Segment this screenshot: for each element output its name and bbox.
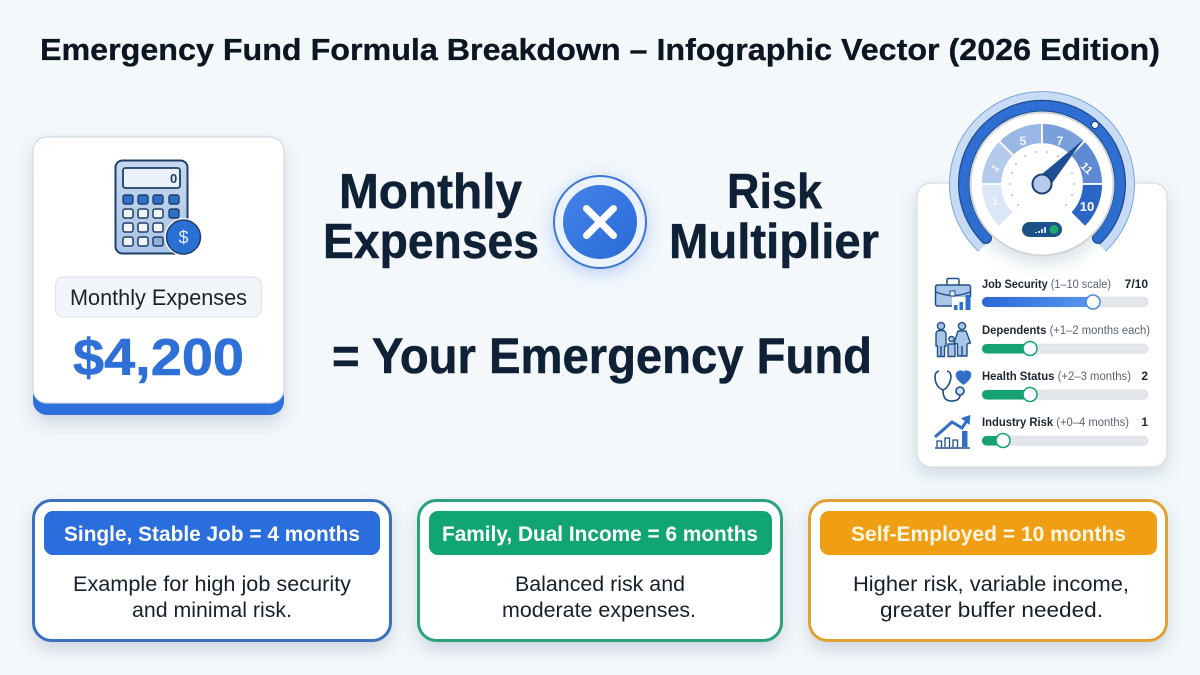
formula: risk multiplier (669, 165, 879, 269)
formula result: = Your Emergency Fund (332, 328, 872, 384)
icon: rising chart (935, 415, 970, 448)
formula: monthly expenses: Monthly (339, 165, 522, 219)
slider: industry risk (982, 415, 1148, 448)
label pill: Monthly Expenses (70, 285, 247, 310)
scenario card: family (418, 500, 782, 640)
scenario card: single (34, 500, 390, 640)
icon: stethoscope and heart (935, 371, 970, 401)
slider: job security: 7/10 (1125, 277, 1148, 291)
gauge: 1 (989, 162, 1002, 175)
scenario card: family: Balanced risk and (515, 572, 685, 596)
scenario card: single: Example for high job security (73, 572, 351, 596)
slider: industry risk: Industry Risk (+0–4 months) (982, 417, 1129, 429)
slider: health status (982, 369, 1148, 402)
slider: industry risk: 1 (1141, 415, 1148, 429)
formula: monthly expenses (323, 165, 539, 269)
icon: calculator (116, 160, 202, 256)
gauge: 7 (1057, 134, 1064, 148)
gauge: 10 (1080, 199, 1094, 214)
scenario card: family: Family, Dual Income = 6 months (442, 523, 758, 546)
gauge: 11 (1078, 160, 1095, 177)
panel: risk multiplier (917, 96, 1167, 467)
slider: job security (982, 277, 1148, 309)
gauge: 5 (1020, 134, 1027, 148)
formula: risk multiplier: Risk (727, 165, 823, 219)
amount: $4,200 (73, 329, 244, 387)
slider: dependents: Dependents (+1–2 months each) (982, 325, 1150, 337)
icon: briefcase (936, 278, 972, 311)
icon: multiply button (554, 176, 646, 268)
icon: calculator: 0 (170, 171, 177, 186)
scenario card: single: Single, Stable Job = 4 months (64, 523, 360, 546)
title: Emergency Fund Formula Breakdown – Infographic Vector (2026 Edition) (40, 32, 1160, 67)
slider: health status: 2 (1141, 369, 1148, 383)
slider: dependents (982, 325, 1150, 356)
gauge: 1 (992, 196, 998, 208)
slider: health status: Health Status (+2–3 months) (982, 371, 1131, 383)
label pill (56, 277, 262, 317)
icon: family (936, 322, 970, 356)
icon: calculator: $ (178, 228, 189, 248)
scenario card: self-employed: Self-Employed = 10 months (851, 523, 1126, 546)
formula: monthly expenses: Expenses (323, 215, 539, 269)
scenario card: self-employed: greater buffer needed. (880, 598, 1103, 622)
slider: job security: Job Security (1–10 scale) (982, 279, 1111, 291)
scenario card: family: moderate expenses. (502, 598, 696, 622)
scenario card: self-employed (810, 500, 1166, 640)
formula: risk multiplier: Multiplier (669, 215, 879, 269)
panel: monthly expenses (33, 137, 284, 415)
gauge (954, 96, 1130, 256)
scenario card: self-employed: Higher risk, variable income, (853, 572, 1129, 596)
scenario card: single: and minimal risk. (132, 598, 292, 622)
